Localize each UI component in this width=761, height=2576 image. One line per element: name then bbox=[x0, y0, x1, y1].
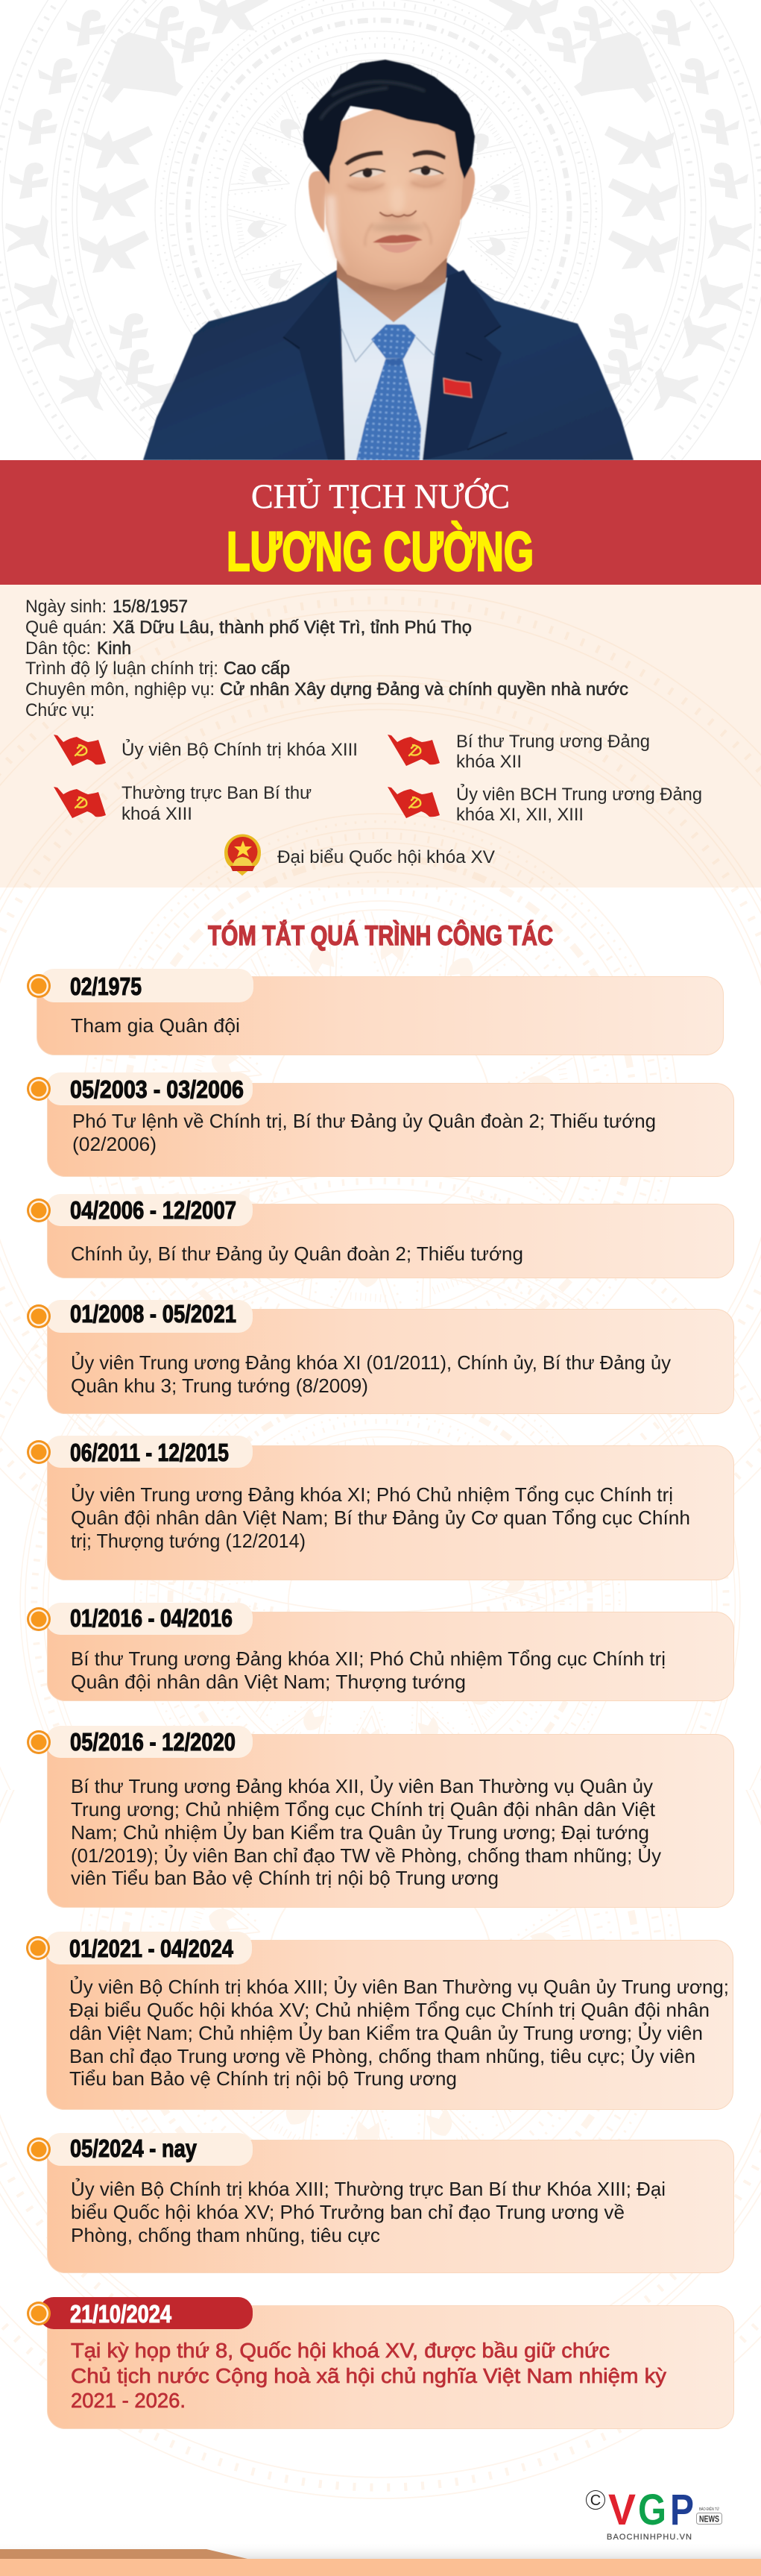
description: Chính ủy, Bí thư Đảng ủy Quân đoàn 2; Thiếu tướng bbox=[71, 1243, 523, 1265]
political theory level: Cao cấp bbox=[224, 659, 290, 679]
timeline marker bbox=[27, 2302, 51, 2325]
ears bbox=[309, 171, 326, 233]
timeline marker bbox=[27, 1607, 51, 1631]
date tab bbox=[46, 1072, 253, 1105]
date tab bbox=[45, 1932, 252, 1964]
logo: VGP news bbox=[586, 2486, 721, 2542]
description: Bí thư Trung ương Đảng khóa XII; Phó Chủ nhiệm Tổng cục Chính trị bbox=[71, 1647, 666, 1670]
necktie bbox=[356, 324, 421, 460]
timeline entry: 04/2006 - 12/2007 bbox=[27, 1194, 733, 1278]
description: 2021 - 2026. bbox=[71, 2389, 186, 2412]
description: Nam; Chủ nhiệm Ủy ban Kiểm tra Quân ủy Trung ương; Đại tướng bbox=[71, 1821, 649, 1844]
description bbox=[71, 1647, 666, 1693]
right eye bbox=[409, 166, 443, 176]
timeline marker bbox=[27, 1304, 51, 1328]
peach band bbox=[0, 2559, 761, 2576]
small caption: BÁO ĐIỆN TỬ bbox=[699, 2506, 720, 2512]
position 2: Bí thư Trung ương Đảng bbox=[456, 732, 650, 752]
description: Ủy viên Bộ Chính trị khóa XIII; Ủy viên Ban Thường vụ Quân ủy Trung ương; bbox=[69, 1975, 729, 1998]
position 4 bbox=[456, 783, 702, 825]
description: Quân đội nhân dân Việt Nam; Bí thư Đảng ủy Cơ quan Tổng cục Chính bbox=[71, 1507, 690, 1529]
icon: party flag 2 bbox=[388, 735, 440, 766]
portrait photo bbox=[143, 60, 634, 460]
description: Tại kỳ họp thứ 8, Quốc hội khoá XV, được bầu giữ chức bbox=[71, 2339, 610, 2362]
description bbox=[71, 1351, 671, 1397]
icon: party flag 1 bbox=[54, 735, 106, 766]
date tab bbox=[46, 1726, 253, 1758]
position 3: Thường trực Ban Bí thư bbox=[121, 783, 312, 803]
position 3: khoá XIII bbox=[121, 804, 192, 824]
wrinkles bbox=[347, 179, 446, 246]
description: Quân đội nhân dân Việt Nam; Thượng tướng bbox=[71, 1671, 466, 1693]
title: role: CHỦ TỊCH NƯỚC bbox=[251, 477, 510, 516]
birth date: Ngày sinh: bbox=[25, 597, 107, 617]
profession bbox=[25, 679, 628, 700]
mouth bbox=[373, 234, 423, 243]
description: Ủy viên Trung ương Đảng khóa XI; Phó Chủ nhiệm Tổng cục Chính trị bbox=[71, 1483, 673, 1506]
icon: party flag 3 bbox=[54, 787, 106, 818]
date tab bbox=[46, 1603, 253, 1635]
date: 05/2003 - 03/2006 bbox=[70, 1075, 244, 1103]
face bbox=[325, 104, 464, 290]
timeline entry: 05/2016 - 12/2020 bbox=[27, 1726, 733, 1908]
neck bbox=[337, 254, 447, 322]
timeline entry: 01/2021 - 04/2024 bbox=[26, 1932, 733, 2109]
date: 02/1975 bbox=[70, 973, 142, 1000]
timeline marker bbox=[26, 1936, 50, 1960]
position 1: Ủy viên Bộ Chính trị khóa XIII bbox=[121, 738, 358, 760]
description bbox=[71, 2339, 666, 2412]
footer band bbox=[0, 2542, 761, 2576]
description: Tiểu ban Bảo vệ Chính trị nội bộ Trung ương bbox=[69, 2067, 457, 2090]
hair bbox=[303, 60, 475, 184]
positions label: Chức vụ: bbox=[25, 700, 95, 720]
timeline marker bbox=[27, 1440, 51, 1464]
hometown: Xã Dữu Lâu, thành phố Việt Trì, tỉnh Phú Thọ bbox=[113, 618, 472, 638]
date: 05/2016 - 12/2020 bbox=[70, 1728, 236, 1756]
description: Phó Tư lệnh về Chính trị, Bí thư Đảng ủy Quân đoàn 2; Thiếu tướng bbox=[72, 1110, 656, 1132]
position 3 bbox=[121, 783, 312, 824]
position 4: Ủy viên BCH Trung ương Đảng bbox=[456, 783, 702, 805]
date tab bbox=[46, 1194, 253, 1226]
icon: party flag 4 bbox=[388, 787, 440, 818]
timeline entry: 05/2003 - 03/2006 bbox=[27, 1072, 733, 1177]
description: viên Tiểu ban Bảo vệ Chính trị nội bộ Trung ương bbox=[71, 1867, 499, 1889]
description: Ban chỉ đạo Trung ương về Phòng, chống tham nhũng, tiêu cực; Ủy viên bbox=[69, 2044, 695, 2067]
left cheek highlight bbox=[326, 195, 346, 268]
position 2 bbox=[456, 732, 650, 772]
timeline marker bbox=[27, 1199, 51, 1222]
timeline marker bbox=[27, 1730, 51, 1754]
section heading: TÓM TẮT QUÁ TRÌNH CÔNG TÁC bbox=[208, 920, 553, 951]
shirt and collar bbox=[337, 274, 447, 460]
copyright mark: C bbox=[590, 2492, 601, 2509]
left eye bbox=[350, 168, 385, 178]
date tab bbox=[46, 1436, 253, 1468]
position 4: khóa XI, XII, XIII bbox=[456, 805, 584, 825]
timeline entry: 02/1975 bbox=[27, 969, 723, 1055]
letter G: G bbox=[638, 2486, 666, 2534]
date tab bbox=[46, 1300, 253, 1333]
timeline entry: 06/2011 - 12/2015 bbox=[27, 1436, 733, 1580]
description: Chủ tịch nước Cộng hoà xã hội chủ nghĩa Việt Nam nhiệm kỳ bbox=[71, 2364, 666, 2387]
ethnicity: Dân tộc: bbox=[25, 638, 91, 659]
nose bbox=[380, 211, 416, 216]
timeline entry: 21/10/2024 highlighted bbox=[27, 2297, 733, 2428]
title: name: LƯƠNG CƯỜNG bbox=[227, 521, 534, 582]
hair highlight bbox=[320, 82, 425, 119]
personal info panel bbox=[0, 585, 761, 888]
copyright mark bbox=[586, 2491, 605, 2509]
letter P: P bbox=[670, 2486, 694, 2534]
description: (02/2006) bbox=[72, 1133, 157, 1155]
timeline entry: 05/2024 - nay bbox=[27, 2133, 733, 2273]
date tab bbox=[40, 2297, 253, 2329]
description: Quân khu 3; Trung tướng (8/2009) bbox=[71, 1375, 368, 1397]
timeline entry: 01/2016 - 04/2016 bbox=[27, 1603, 733, 1700]
hometown: Quê quán: bbox=[25, 618, 107, 638]
left lapel bbox=[283, 273, 345, 460]
date tab bbox=[40, 969, 253, 1002]
nose highlight bbox=[390, 186, 405, 213]
description: Ủy viên Trung ương Đảng khóa XI (01/2011), Chính ủy, Bí thư Đảng ủy bbox=[71, 1351, 671, 1374]
date tab bbox=[46, 2133, 253, 2166]
icon: national emblem bbox=[224, 834, 261, 876]
background: faint drum pattern for the timeline bbox=[0, 888, 761, 2499]
background: bronze drum pattern bbox=[0, 0, 761, 460]
date: 05/2024 - nay bbox=[70, 2134, 198, 2162]
description: Trung ương; Chủ nhiệm Tổng cục Chính trị Quân đội nhân dân Việt bbox=[71, 1798, 656, 1821]
right lapel bbox=[423, 270, 502, 460]
position 2: khóa XII bbox=[456, 752, 522, 772]
description: Bí thư Trung ương Đảng khóa XII, Ủy viên Ban Thường vụ Quân ủy bbox=[71, 1774, 653, 1797]
suit jacket bbox=[143, 263, 634, 460]
description: Phòng, chống tham nhũng, tiêu cực bbox=[71, 2224, 380, 2246]
timeline marker bbox=[27, 974, 51, 998]
timeline marker bbox=[27, 2137, 51, 2161]
profession: Chuyên môn, nghiệp vụ: bbox=[25, 679, 215, 700]
profession: Cử nhân Xây dựng Đảng và chính quyền nhà nước bbox=[220, 679, 628, 700]
date: 01/2016 - 04/2016 bbox=[70, 1604, 233, 1632]
description: trị; Thượng tướng (12/2014) bbox=[71, 1530, 306, 1552]
lapel pin: party flag bbox=[443, 378, 472, 398]
description: dân Việt Nam; Chủ nhiệm Ủy ban Kiểm tra Quân ủy Trung ương; Ủy viên bbox=[69, 2021, 703, 2044]
facial shadows bbox=[347, 178, 444, 291]
date: 06/2011 - 12/2015 bbox=[70, 1439, 229, 1466]
title banner bbox=[0, 460, 761, 585]
ethnicity: Kinh bbox=[97, 638, 131, 659]
website: BAOCHINHPHU.VN bbox=[607, 2533, 692, 2542]
description bbox=[71, 1483, 690, 1552]
news badge: NEWS bbox=[699, 2513, 719, 2524]
description: Đại biểu Quốc hội khóa XV; Chủ nhiệm Tổng cục Chính trị Quân đội nhân bbox=[69, 1999, 710, 2021]
eyebrows bbox=[344, 151, 383, 166]
description bbox=[71, 2177, 666, 2246]
date: 01/2021 - 04/2024 bbox=[69, 1935, 234, 1962]
description bbox=[69, 1975, 729, 2090]
brown tab bbox=[0, 2549, 247, 2559]
political theory level: Trình độ lý luận chính trị: bbox=[25, 659, 218, 679]
letter V: V bbox=[608, 2486, 636, 2534]
birth date bbox=[25, 597, 188, 617]
birth date: 15/8/1957 bbox=[113, 597, 188, 617]
position 5: Đại biểu Quốc hội khóa XV bbox=[277, 847, 495, 867]
description: (01/2019); Ủy viên Ban chỉ đạo TW về Phòng, chống tham nhũng; Ủy bbox=[71, 1844, 661, 1867]
description bbox=[72, 1110, 656, 1155]
description bbox=[71, 1774, 661, 1889]
timeline marker bbox=[27, 1077, 51, 1101]
date: 04/2006 - 12/2007 bbox=[70, 1196, 236, 1224]
description: Ủy viên Bộ Chính trị khóa XIII; Thường trực Ban Bí thư Khóa XIII; Đại bbox=[71, 2177, 666, 2200]
description: Tham gia Quân đội bbox=[71, 1014, 240, 1037]
timeline entry: 01/2008 - 05/2021 bbox=[27, 1300, 733, 1414]
date: 01/2008 - 05/2021 bbox=[70, 1300, 236, 1328]
description: biểu Quốc hội khóa XV; Phó Trưởng ban chỉ đạo Trung ương về bbox=[71, 2201, 625, 2223]
date: 21/10/2024 bbox=[70, 2300, 172, 2328]
ethnicity bbox=[25, 638, 131, 659]
